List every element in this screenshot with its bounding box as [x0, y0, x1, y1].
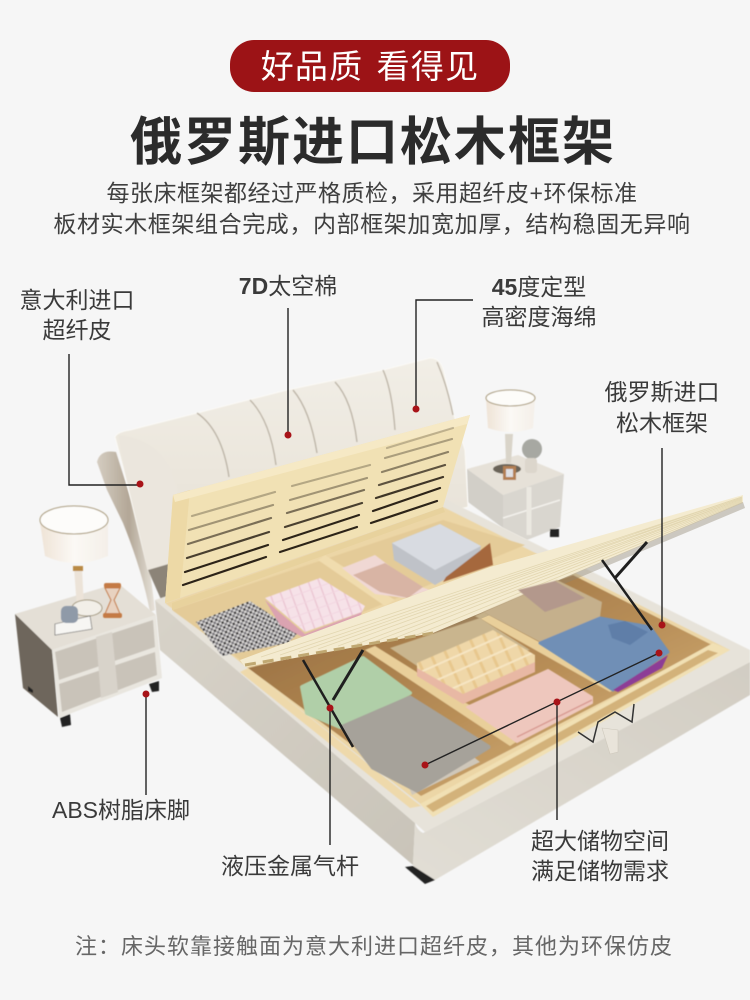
folded clothes in rear compartment	[196, 524, 493, 656]
upholstered headboard	[115, 358, 468, 604]
folded clothes in front compartment	[302, 580, 668, 795]
callout: 超大储物空间: 满足储物需求	[531, 858, 669, 884]
gas strut hinges	[303, 542, 652, 747]
left nightstand	[15, 583, 162, 727]
badge: 好品质 看得见	[230, 40, 510, 92]
callout: 超大储物空间	[422, 650, 669, 884]
bed base frame	[155, 500, 750, 884]
badge: 好品质 看得见: 好品质 看得见	[261, 48, 479, 85]
subtitle text: 每张床框架都经过严格质检，采用超纤皮+环保标准	[107, 180, 637, 206]
lifted slatted bed lid	[240, 495, 745, 667]
callout: 意大利进口超纤皮: 意大利进口	[20, 287, 134, 313]
storage interior	[165, 507, 730, 817]
callout: 意大利进口超纤皮	[20, 287, 144, 488]
footnote: 注：床头软靠接触面为意大利进口超纤皮，其他为环保仿皮	[75, 934, 673, 959]
title: 俄罗斯进口松木框架	[130, 114, 616, 172]
right nightstand and lamp	[467, 390, 564, 540]
lid lift handle	[578, 704, 634, 754]
callout: 液压金属气杆: 液压金属气杆	[221, 853, 359, 879]
subtitle text: 板材实木框架组合完成，内部框架加宽加厚，结构稳固无异响	[53, 211, 691, 237]
callout: 俄罗斯进口松木框架: 松木框架	[616, 410, 708, 436]
callout: 意大利进口超纤皮: 超纤皮	[42, 317, 112, 343]
callout: 俄罗斯进口松木框架	[604, 379, 720, 628]
callout: ABS树脂床脚: ABS树脂床脚	[52, 797, 190, 823]
table lamp and desk ornaments	[40, 506, 122, 635]
callout: 7D太空棉: 7D太空棉	[239, 273, 337, 299]
callout: ABS树脂床脚	[52, 690, 190, 823]
callout: 超大储物空间: 超大储物空间	[531, 828, 669, 854]
bed side wing	[97, 451, 155, 612]
subtitle text	[53, 180, 691, 237]
callout: 俄罗斯进口松木框架: 俄罗斯进口	[604, 379, 720, 405]
callout: 45度定型高密度海绵: 45度定型	[492, 274, 586, 300]
callout: 45度定型高密度海绵	[412, 274, 596, 412]
slatted pine headboard panel	[165, 415, 470, 610]
callout: 7D太空棉	[239, 273, 337, 438]
callout: 液压金属气杆	[221, 704, 359, 879]
callout: 45度定型高密度海绵: 高密度海绵	[482, 304, 596, 330]
